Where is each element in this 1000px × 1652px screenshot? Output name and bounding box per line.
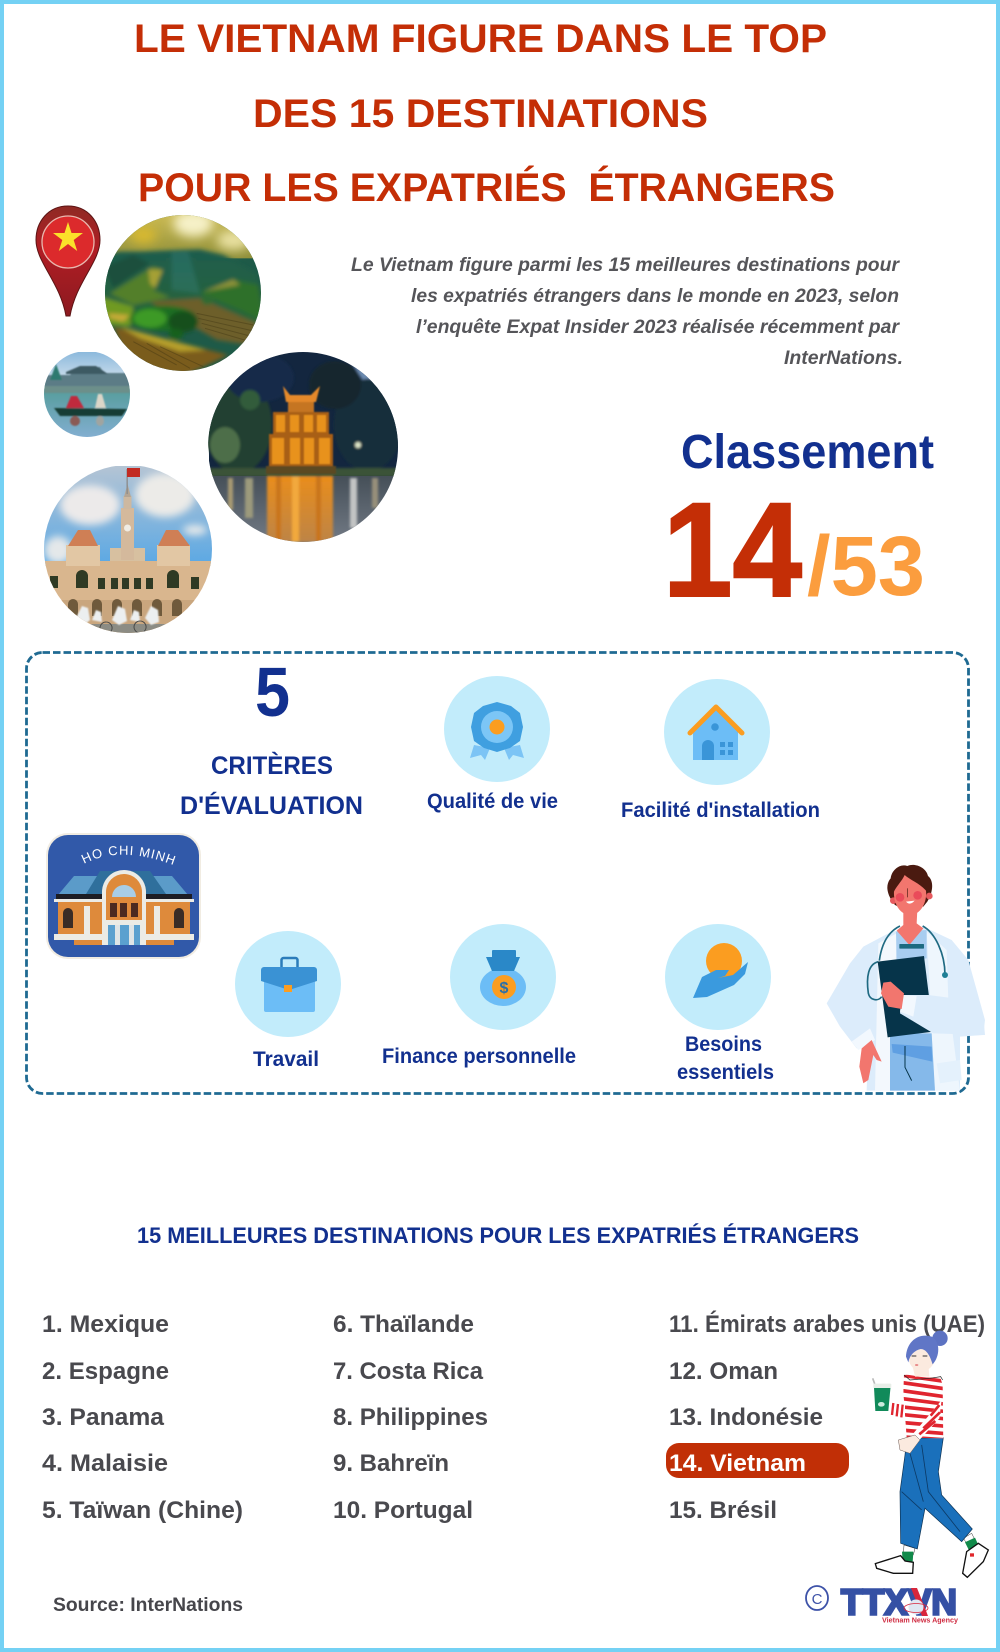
title: POUR LES EXPATRIÉS ÉTRANGERS	[138, 165, 835, 210]
icon: map pin with Vietnamese flag	[36, 206, 100, 316]
head	[890, 897, 897, 904]
list: ranks 1 to 5: 3. Panama	[42, 1404, 165, 1431]
criterion: ease of settling	[621, 679, 820, 822]
ranking	[663, 426, 934, 625]
sleeve with cup arm	[887, 1402, 905, 1418]
intro paragraph: Le Vietnam figure parmi les 15 meilleures destinations pour	[351, 255, 901, 276]
cup	[874, 1386, 891, 1411]
scrubs	[896, 930, 927, 962]
criterion: personal finance: Finance personnelle	[382, 1045, 576, 1068]
title: DES 15 DESTINATIONS	[253, 92, 708, 136]
heading: five criteria: D'ÉVALUATION	[180, 791, 363, 820]
forearm	[900, 995, 985, 1035]
stethoscope	[879, 926, 945, 975]
list: ranks 1 to 5: 5. Taïwan (Chine)	[42, 1497, 243, 1524]
logo: TTXVN copyright: Vietnam News Agency	[882, 1616, 959, 1624]
photo: rice terraces	[105, 215, 261, 371]
trousers	[900, 1438, 972, 1549]
list: ranks 6 to 10: 7. Costa Rica	[333, 1358, 484, 1385]
criterion: basic needs: Besoins	[685, 1033, 762, 1056]
title: LE VIETNAM FIGURE DANS LE TOP	[134, 17, 827, 61]
list: ranks 6 to 10: 9. Bahreïn	[333, 1450, 449, 1477]
criterion: work	[235, 931, 341, 1071]
intro paragraph: InterNations.	[784, 348, 903, 369]
badge lettering: HO CHI MINH	[81, 846, 176, 865]
logo: TTXVN copyright: C	[812, 1591, 823, 1608]
hair with bun	[932, 1331, 948, 1346]
list: ranks 6 to 10	[333, 1311, 488, 1524]
list: ranks 6 to 10: 8. Philippines	[333, 1404, 488, 1431]
criterion: work: Travail	[253, 1048, 319, 1071]
clipboard	[878, 956, 933, 1037]
list: ranks 11 to 15: 11. Émirats arabes unis (UAE)	[669, 1310, 985, 1338]
illustration: doctor	[827, 865, 985, 1091]
neck and face	[913, 1363, 929, 1377]
list: ranks 1 to 5	[42, 1311, 243, 1524]
hair back	[887, 865, 932, 907]
ranking label: Classement	[681, 426, 934, 479]
highlighted rank: Vietnam	[666, 1443, 849, 1478]
rank total: /53	[807, 519, 925, 613]
neck	[897, 910, 923, 945]
criterion: personal finance: $	[500, 980, 509, 997]
list: ranks 1 to 5: 4. Malaisie	[42, 1450, 168, 1477]
trouser cuffs and socks	[903, 1545, 915, 1555]
criterion: personal finance	[382, 924, 576, 1068]
heading: five criteria: CRITÈRES	[211, 751, 333, 780]
panel: evaluation criteria	[26, 652, 968, 1094]
highlighted rank: Vietnam: 14. Vietnam	[669, 1450, 806, 1477]
heading: top 15 destinations: 15 MEILLEURES DESTINATIONS POUR LES EXPATRIÉS ÉTRANGERS	[137, 1223, 859, 1248]
photo: Turtle Tower at night	[204, 352, 402, 542]
hands	[881, 982, 904, 1009]
intro paragraph: l’enquête Expat Insider 2023 réalisée récemment par	[416, 317, 901, 338]
photo: boat on lake	[44, 352, 130, 437]
hand	[898, 1435, 920, 1453]
rank number: 14	[663, 476, 802, 625]
criterion: quality of life: Qualité de vie	[427, 790, 558, 813]
list: ranks 11 to 15: 13. Indonésie	[669, 1404, 823, 1431]
criterion: quality of life	[427, 676, 558, 813]
criterion: basic needs: essentiels	[677, 1061, 774, 1084]
list: ranks 11 to 15: 12. Oman	[669, 1358, 778, 1385]
heading: five criteria	[180, 653, 363, 820]
criterion: ease of settling: Facilité d'installation	[621, 799, 820, 822]
list: ranks 11 to 15: 15. Brésil	[669, 1497, 777, 1524]
list: ranks 6 to 10: 10. Portugal	[333, 1497, 473, 1524]
source: Source: InterNations	[53, 1595, 243, 1616]
photo: Ho Chi Minh City Hall	[44, 466, 212, 634]
list: ranks 1 to 5: 2. Espagne	[42, 1358, 169, 1385]
white coat	[827, 927, 985, 1091]
shoes	[875, 1556, 913, 1573]
list: ranks 11 to 15	[666, 1310, 985, 1524]
illustration: walking woman with cup	[873, 1331, 988, 1577]
title	[134, 17, 835, 210]
heading: five criteria: 5	[255, 653, 290, 731]
logo: TTXVN copyright: TTXVN	[841, 1582, 957, 1622]
icon: Ho Chi Minh badge with opera house	[46, 833, 201, 959]
list: ranks 6 to 10: 6. Thaïlande	[333, 1311, 474, 1338]
criterion: basic needs	[665, 924, 774, 1084]
list: ranks 1 to 5: 1. Mexique	[42, 1311, 169, 1338]
striped sweater	[903, 1374, 944, 1438]
intro paragraph	[351, 255, 903, 369]
intro paragraph: les expatriés étrangers dans le monde en 2023, selon	[411, 286, 899, 307]
